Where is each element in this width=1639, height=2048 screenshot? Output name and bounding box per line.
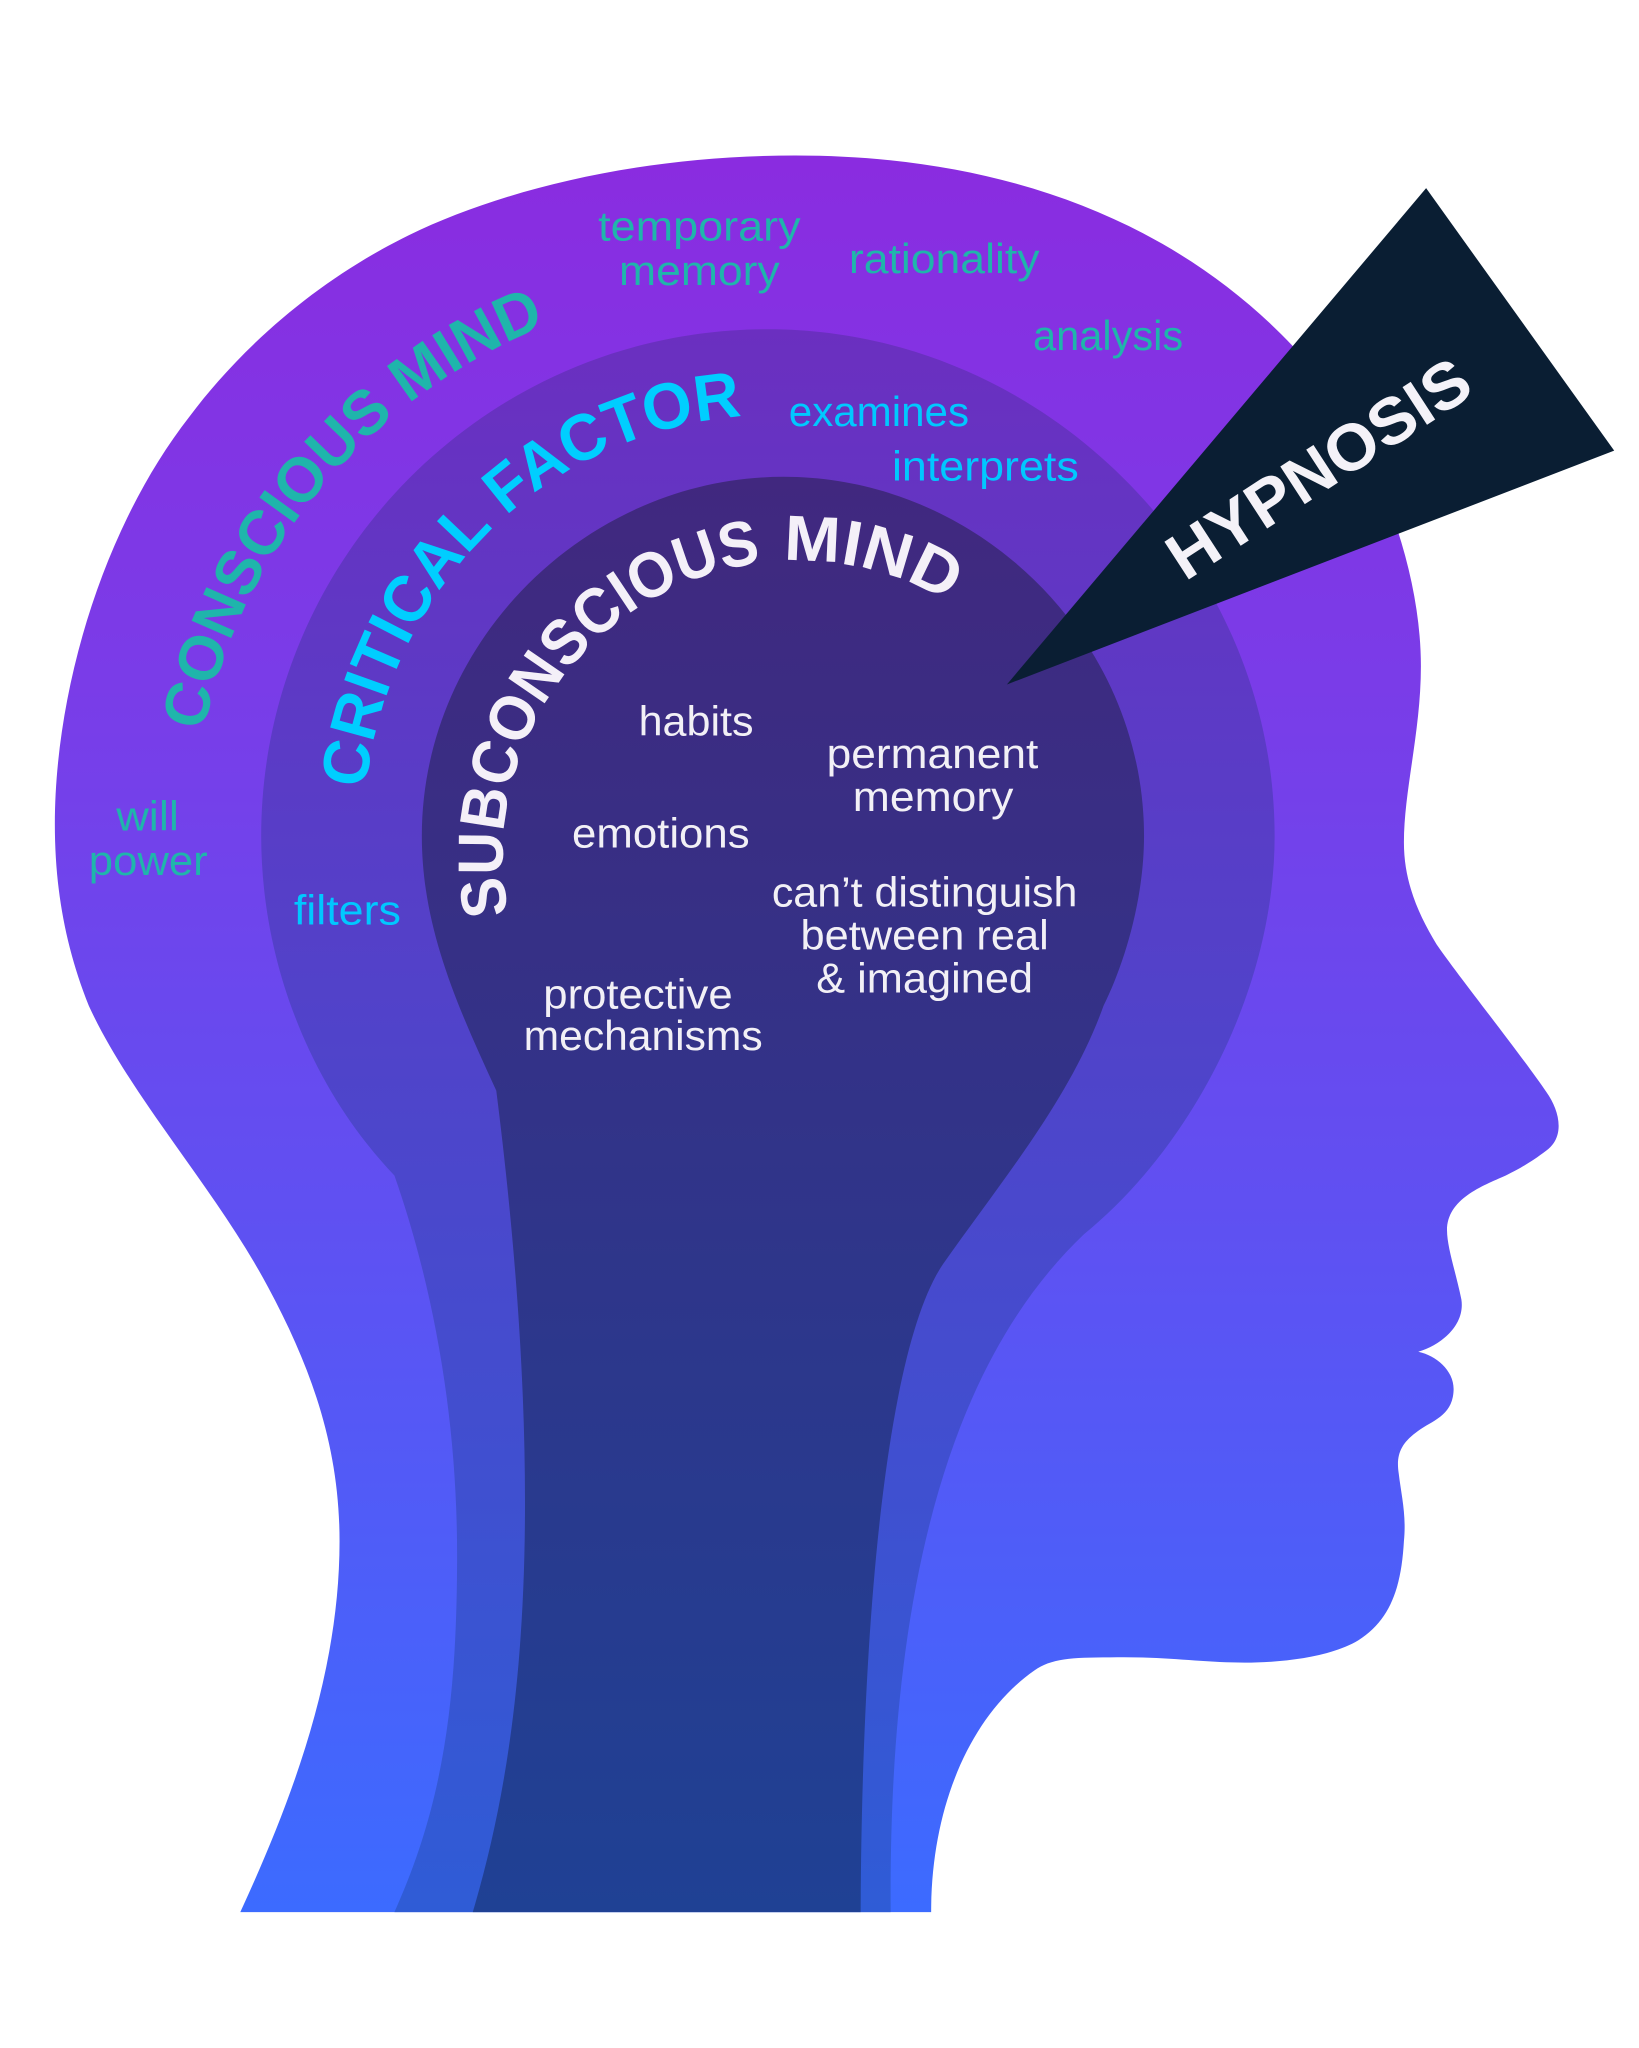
text: filters: filters [294, 887, 401, 934]
critical factor attributes [294, 388, 1079, 934]
text: temporary memory: memory [619, 247, 780, 294]
hypnosis wedge arrow [1007, 188, 1614, 684]
text: will power [89, 793, 208, 884]
hypnosis label: HYPNOSIS [1153, 343, 1484, 594]
subconscious mind attributes [524, 697, 1077, 1059]
text: interprets: interprets [892, 443, 1079, 490]
subconscious mind layer [422, 477, 1144, 1912]
text: permanent memory [827, 730, 1039, 820]
text: temporary memory: temporary [598, 202, 801, 249]
text: can't distinguish between real and imagined [772, 868, 1077, 1002]
heading: critical factor: CRITICAL FACTOR [324, 374, 741, 784]
heading: subconscious mind: SUBCONSCIOUS MIND [458, 516, 959, 916]
head silhouette: conscious mind layer [55, 156, 1559, 1912]
text: will power: will [115, 793, 179, 840]
text: emotions: emotions [572, 810, 750, 857]
text: temporary memory [598, 202, 801, 294]
text: can't distinguish between real and imagined: between real [801, 912, 1049, 959]
text: can't distinguish between real and imagined: & imagined [816, 955, 1033, 1002]
text: protective mechanisms [524, 970, 763, 1059]
text: protective mechanisms: protective [543, 970, 733, 1017]
text: habits: habits [639, 697, 754, 744]
conscious mind attributes [89, 202, 1183, 884]
text: can't distinguish between real and imagined: can’t distinguish [772, 868, 1077, 915]
heading: conscious mind: CONSCIOUS MIND [166, 292, 538, 725]
text: analysis: analysis [1033, 312, 1183, 359]
critical factor layer [261, 329, 1275, 1912]
text: examines: examines [789, 388, 969, 435]
text: will power: power [89, 837, 208, 884]
text: permanent memory: memory [853, 773, 1014, 820]
text: permanent memory: permanent [827, 730, 1039, 777]
text: rationality: rationality [849, 235, 1040, 282]
text: protective mechanisms: mechanisms [524, 1012, 763, 1059]
